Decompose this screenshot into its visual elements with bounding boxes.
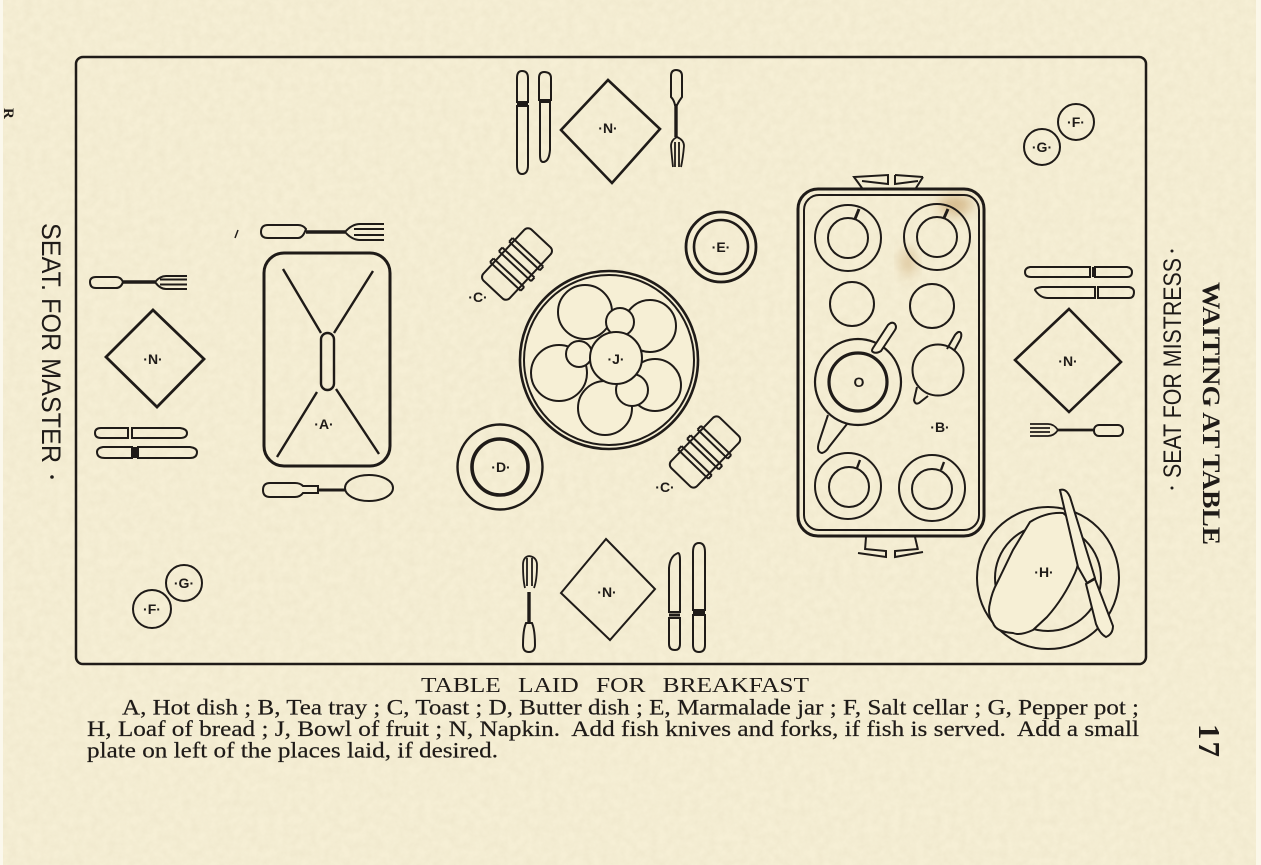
running head: WAITING AT TABLE — [1197, 282, 1224, 545]
tray label: ·B· — [930, 419, 950, 435]
knives top — [517, 71, 551, 174]
master fork — [90, 276, 187, 289]
napkin bottom: ·N· — [597, 584, 617, 600]
knives bottom — [669, 543, 705, 652]
napkin master: ·N· — [143, 351, 163, 367]
fork bottom — [523, 556, 537, 652]
table outline — [76, 57, 1146, 664]
hot dish A — [264, 253, 390, 466]
salt and pepper top right: ·F· — [1067, 114, 1085, 130]
bowl of fruit: ·J· — [607, 351, 625, 367]
milk jug — [912, 332, 964, 404]
napkin mistress: ·N· — [1058, 353, 1078, 369]
loaf of bread: ·H· — [1034, 564, 1054, 580]
napkin mistress — [1015, 309, 1121, 412]
stray mark — [235, 230, 238, 238]
caption body: plate on left of the places laid, if desired. — [87, 738, 498, 762]
seat for master label: SEAT. FOR MASTER — [36, 223, 66, 463]
bowl of fruit — [520, 271, 698, 449]
toast lower — [655, 412, 745, 495]
fork top — [671, 70, 684, 167]
caption body: A, Hot dish ; B, Tea tray ; C, Toast ; D, Butter dish ; E, Marmalade jar ; F, Salt cellar ; G, Pepper pot ; — [122, 694, 1139, 720]
tea tray — [798, 175, 984, 557]
tray handles — [854, 175, 923, 557]
fork upper left — [261, 224, 384, 240]
marmalade: ·E· — [712, 239, 730, 255]
toast lower: ·C· — [655, 479, 675, 495]
caption title: TABLE LAID FOR BREAKFAST — [421, 673, 809, 697]
margin mark: R — [0, 108, 16, 119]
mistress fork — [1030, 424, 1123, 436]
seat for mistress label: SEAT FOR MISTRESS — [1159, 258, 1187, 478]
spoon — [263, 475, 393, 501]
page number: 17 — [1192, 724, 1227, 757]
napkin bottom — [561, 539, 655, 640]
cups and saucers — [815, 204, 970, 521]
toast upper: ·C· — [468, 289, 488, 305]
tray rim — [798, 189, 984, 536]
napkin top — [561, 80, 660, 183]
toast upper — [468, 223, 557, 305]
mistress knives — [1025, 267, 1134, 298]
loaf of bread — [977, 490, 1119, 649]
salt and pepper bottom left: ·F· — [143, 601, 161, 617]
salt and pepper bottom left — [133, 565, 202, 628]
salt and pepper top right — [1024, 104, 1094, 165]
hot dish A: ·A· — [314, 416, 334, 432]
teapot — [815, 323, 901, 453]
butter dish — [458, 424, 542, 510]
salt and pepper top right: ·G· — [1032, 139, 1052, 155]
plates — [830, 282, 954, 328]
butter dish: ·D· — [491, 459, 511, 475]
caption body: H, Loaf of bread ; J, Bowl of fruit ; N, Napkin. Add fish knives and forks, if fish is served. Add a small — [87, 716, 1139, 741]
napkin top: ·N· — [598, 120, 618, 136]
napkin master — [106, 310, 204, 407]
teapot: O — [854, 374, 865, 390]
master knives — [95, 428, 197, 458]
salt and pepper bottom left: ·G· — [174, 575, 194, 591]
marmalade — [686, 212, 756, 282]
caption body — [87, 694, 1139, 762]
